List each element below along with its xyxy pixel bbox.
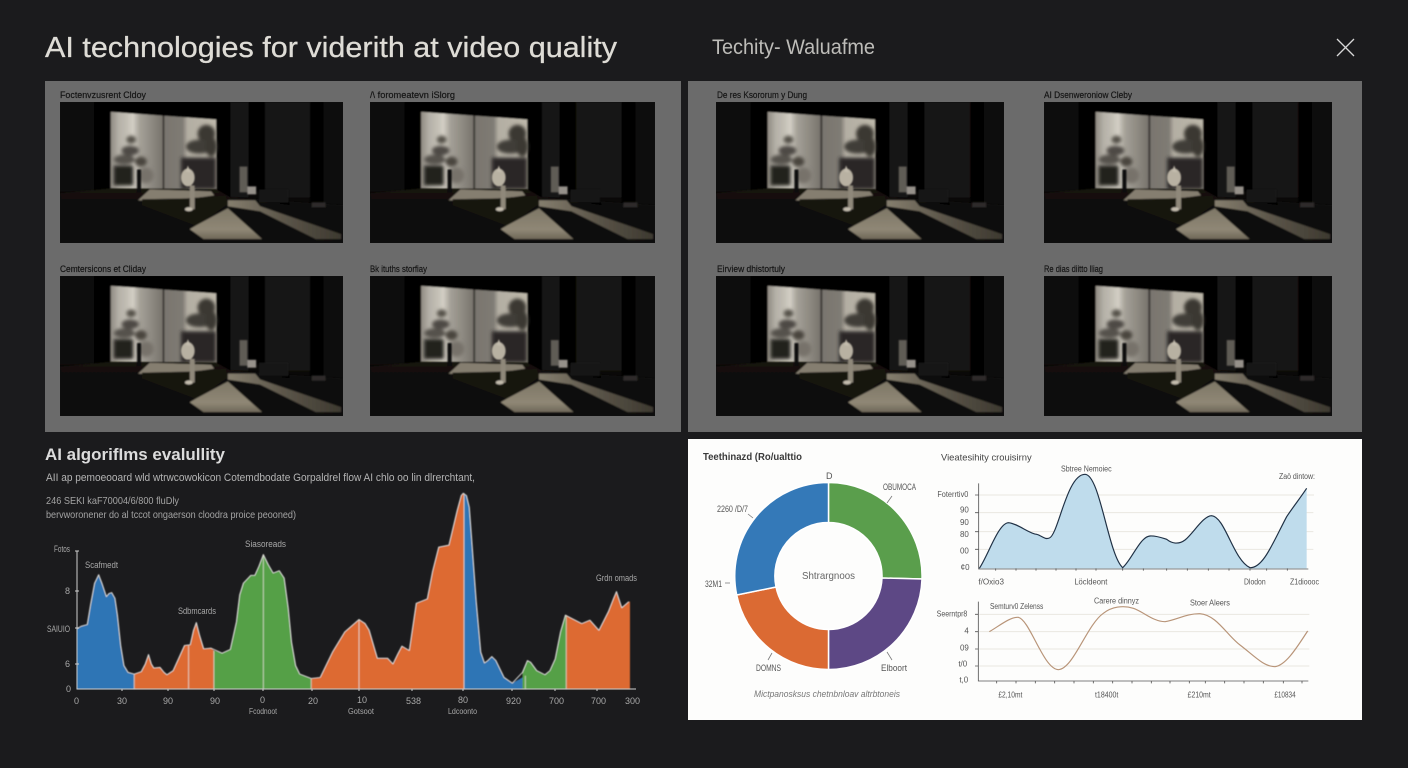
chart labels: Fcodnoot <box>249 707 278 716</box>
label: photo 7: Eirview dhistortuly <box>717 264 785 274</box>
area chart: Foterrtiv0 <box>937 490 969 499</box>
donut: orange <box>737 587 828 670</box>
line chart: Seerntpr8 <box>937 610 968 619</box>
icon: close <box>1337 39 1354 56</box>
line chart: t/0 <box>958 660 968 669</box>
label: photo 5: De res Ksororum y Dung <box>717 90 807 100</box>
line chart: £10834 <box>1274 691 1296 700</box>
chart labels: 20 <box>308 696 318 706</box>
chart labels <box>47 539 640 716</box>
donut chart <box>735 482 922 670</box>
chart labels: 538 <box>406 696 421 706</box>
area: orange segment 3 <box>566 592 630 689</box>
area chart: f/Oxio3 <box>978 577 1005 586</box>
area: orange segment 1 <box>134 622 214 689</box>
area chart: Z1dioooc <box>1290 577 1319 586</box>
donut labels: OBUMOCA <box>883 482 916 492</box>
text block: description <box>46 472 475 521</box>
chart: segmented area chart <box>47 493 640 716</box>
photo 3 <box>60 276 343 416</box>
chart labels: 0 <box>74 696 79 706</box>
chart labels: 0 <box>66 684 71 694</box>
line chart: t,0 <box>959 676 969 685</box>
area chart: Sbtree Nemoiec <box>1061 465 1112 474</box>
area: blue segment 1 <box>77 575 134 689</box>
chart labels: Grdn omads <box>596 573 637 583</box>
label: photo 3: Cemtersicons et Cliday <box>60 264 146 274</box>
chart labels: Siasoreads <box>245 539 286 549</box>
donut: purple <box>828 578 922 670</box>
donut labels: Elboort <box>881 663 907 673</box>
label: photo 6: AI Dsenweroniow Cleby <box>1044 90 1132 100</box>
area chart: ¢0 <box>961 563 970 572</box>
chart labels: 700 <box>549 696 564 706</box>
photo 7 <box>716 276 1004 416</box>
secondary heading: Techity- Waluafme <box>712 36 875 59</box>
area chart: 80 <box>960 530 969 539</box>
donut labels: DOMNS <box>756 663 781 673</box>
line chart: £2,10mt <box>998 691 1023 700</box>
donut leaders <box>725 496 892 660</box>
area: blue segment 2 <box>464 493 525 689</box>
area chart: 00 <box>960 547 969 556</box>
photo 8 <box>1044 276 1332 416</box>
label: photo 4: Bk ituths storfiay <box>370 264 427 274</box>
chart labels: 700 <box>591 696 606 706</box>
right charts <box>937 453 1319 700</box>
line chart: Semturv0 Zelenss <box>990 602 1043 611</box>
photo 2 <box>370 102 655 243</box>
chart labels: 920 <box>506 696 521 706</box>
photo 1 <box>60 102 343 243</box>
chart labels: SAIUIO <box>47 624 70 634</box>
donut labels: 32M1 <box>705 579 722 589</box>
photo 6 <box>1044 102 1332 243</box>
line chart: t18400t <box>1095 691 1119 700</box>
label: photo 2: /\ foromeatevn iSlorg <box>370 90 455 100</box>
title: AI technologies for viderith at video quality <box>45 32 618 64</box>
line chart: Stoer Aleers <box>1190 599 1230 608</box>
chart labels: Scafmedt <box>85 560 118 570</box>
donut labels: Shtrargnoos <box>802 570 855 582</box>
line chart: 09 <box>960 644 969 653</box>
area chart: 90 <box>960 518 969 527</box>
chart labels: 30 <box>117 696 127 706</box>
curve outline <box>77 493 629 683</box>
line chart: £210mt <box>1188 691 1211 700</box>
chart labels: 80 <box>458 695 468 705</box>
donut: blue <box>735 482 828 595</box>
chart labels: 90 <box>163 696 173 706</box>
area chart: Dlodon <box>1244 577 1266 586</box>
chart labels: Ldcoonto <box>448 707 477 716</box>
label: photo 1: Foctenvzusrent Cldoy <box>60 90 146 100</box>
chart labels: 10 <box>357 695 367 705</box>
line chart: Carere dinnyz <box>1094 597 1139 606</box>
chart labels: Gotsoot <box>348 707 375 716</box>
area chart: Löcldeont <box>1074 577 1108 586</box>
chart axes <box>75 551 636 691</box>
area chart: Zaö dintow: <box>1279 472 1315 481</box>
area: green segment 2 <box>522 615 566 689</box>
photo 5 <box>716 102 1004 243</box>
heading: area chart: Vieatesihity crouisirny <box>941 453 1032 463</box>
label: photo 8: Re dias diitto lliag <box>1044 264 1103 274</box>
area: orange segment 2 <box>311 493 464 689</box>
donut labels <box>705 471 916 699</box>
heading: AI algorithms: AI algorifIms evalullity <box>45 445 226 464</box>
donut labels: 2260 /D/7 <box>717 504 748 514</box>
area chart: 90 <box>960 506 969 515</box>
photo 4 <box>370 276 655 416</box>
text block: description: 246 SEKI kaF70004/6/800 fluDly <box>46 495 180 507</box>
panel: left photo grid <box>45 81 681 432</box>
segment dividers <box>134 493 566 689</box>
chart labels: 0 <box>260 695 265 705</box>
heading: donut: Teethinazd (Ro/ualttio <box>703 451 802 463</box>
panel: technical evaluation <box>688 439 1362 720</box>
panel: right photo grid <box>688 81 1362 432</box>
donut: green <box>828 482 922 579</box>
chart labels: 300 <box>625 696 640 706</box>
chart labels: 8 <box>65 586 70 596</box>
line chart <box>937 597 1309 700</box>
line chart: 4 <box>964 627 969 636</box>
chart labels: 90 <box>210 696 220 706</box>
area: green segment 1 <box>214 554 311 689</box>
area chart <box>937 465 1319 586</box>
chart labels: Fotos <box>54 544 70 554</box>
text block: description: AII ap pemoeooard wld wtrwcowokicon Cotemdbodate Gorpaldrel flow AI chlo oo lin dlrerchtant, <box>46 472 475 484</box>
donut labels: D <box>826 471 833 481</box>
text block: description: bervworonener do al tccot ongaerson cloodra proice peooned) <box>46 509 296 521</box>
chart labels: Sdbmcards <box>178 606 216 616</box>
chart labels: 6 <box>65 659 70 669</box>
donut labels: Mictpanosksus chetnbnloav altrbtoneis <box>754 689 900 699</box>
